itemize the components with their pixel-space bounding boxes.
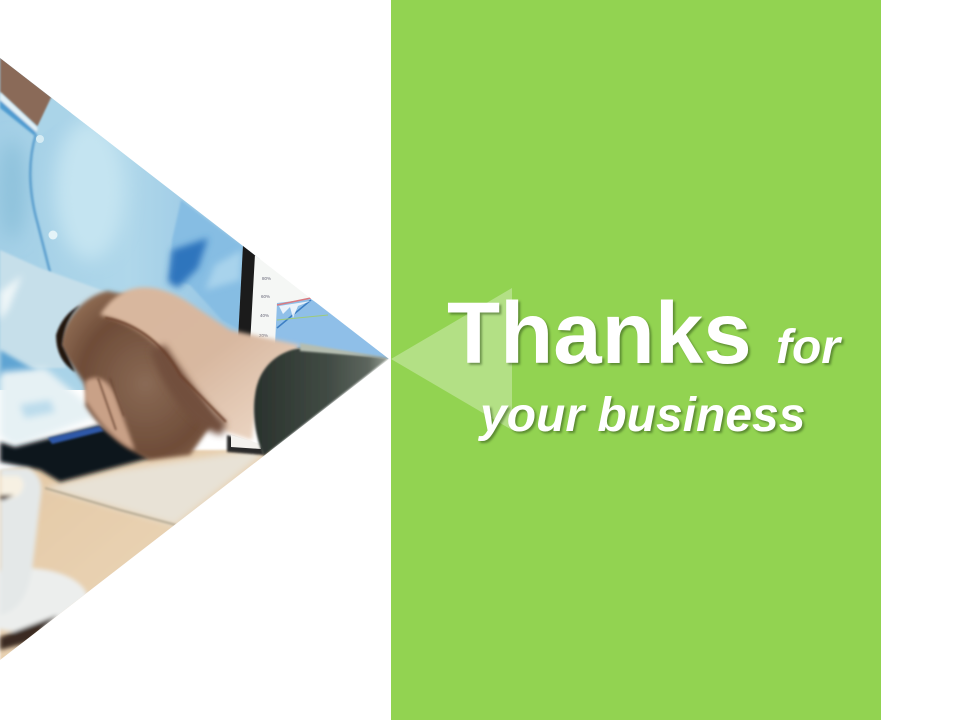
laptop base	[0, 425, 150, 482]
dark suit sleeve	[254, 348, 389, 456]
fingers	[85, 378, 135, 450]
green panel	[391, 0, 881, 720]
line: your business: your business	[480, 389, 805, 442]
neck	[0, 55, 52, 127]
translucent triangle arrow	[391, 288, 512, 430]
right hand	[100, 287, 300, 440]
photo: business handshake in triangle	[0, 58, 389, 660]
right arm sleeve	[170, 200, 243, 330]
word: Thanks: Thanks	[447, 285, 752, 382]
monitor screen with chart: 40%	[260, 313, 269, 318]
monitor bezel	[238, 245, 256, 340]
left hand	[60, 291, 215, 460]
laptop screen and papers	[0, 368, 100, 447]
white cuff sleeve	[0, 250, 107, 368]
monitor screen with chart: 60%	[261, 294, 270, 299]
shirt background	[0, 50, 260, 390]
word: for: for	[776, 321, 840, 374]
watch cuff	[227, 435, 264, 455]
title: Thanks for your business	[447, 285, 845, 444]
monitor screen with chart: 80%	[262, 276, 271, 281]
monitor screen with chart	[250, 254, 389, 359]
cup and saucer	[0, 468, 88, 650]
shirt placket	[30, 134, 50, 272]
table	[0, 448, 271, 660]
collar	[0, 92, 72, 136]
monitor screen with chart: 20%	[259, 333, 268, 338]
